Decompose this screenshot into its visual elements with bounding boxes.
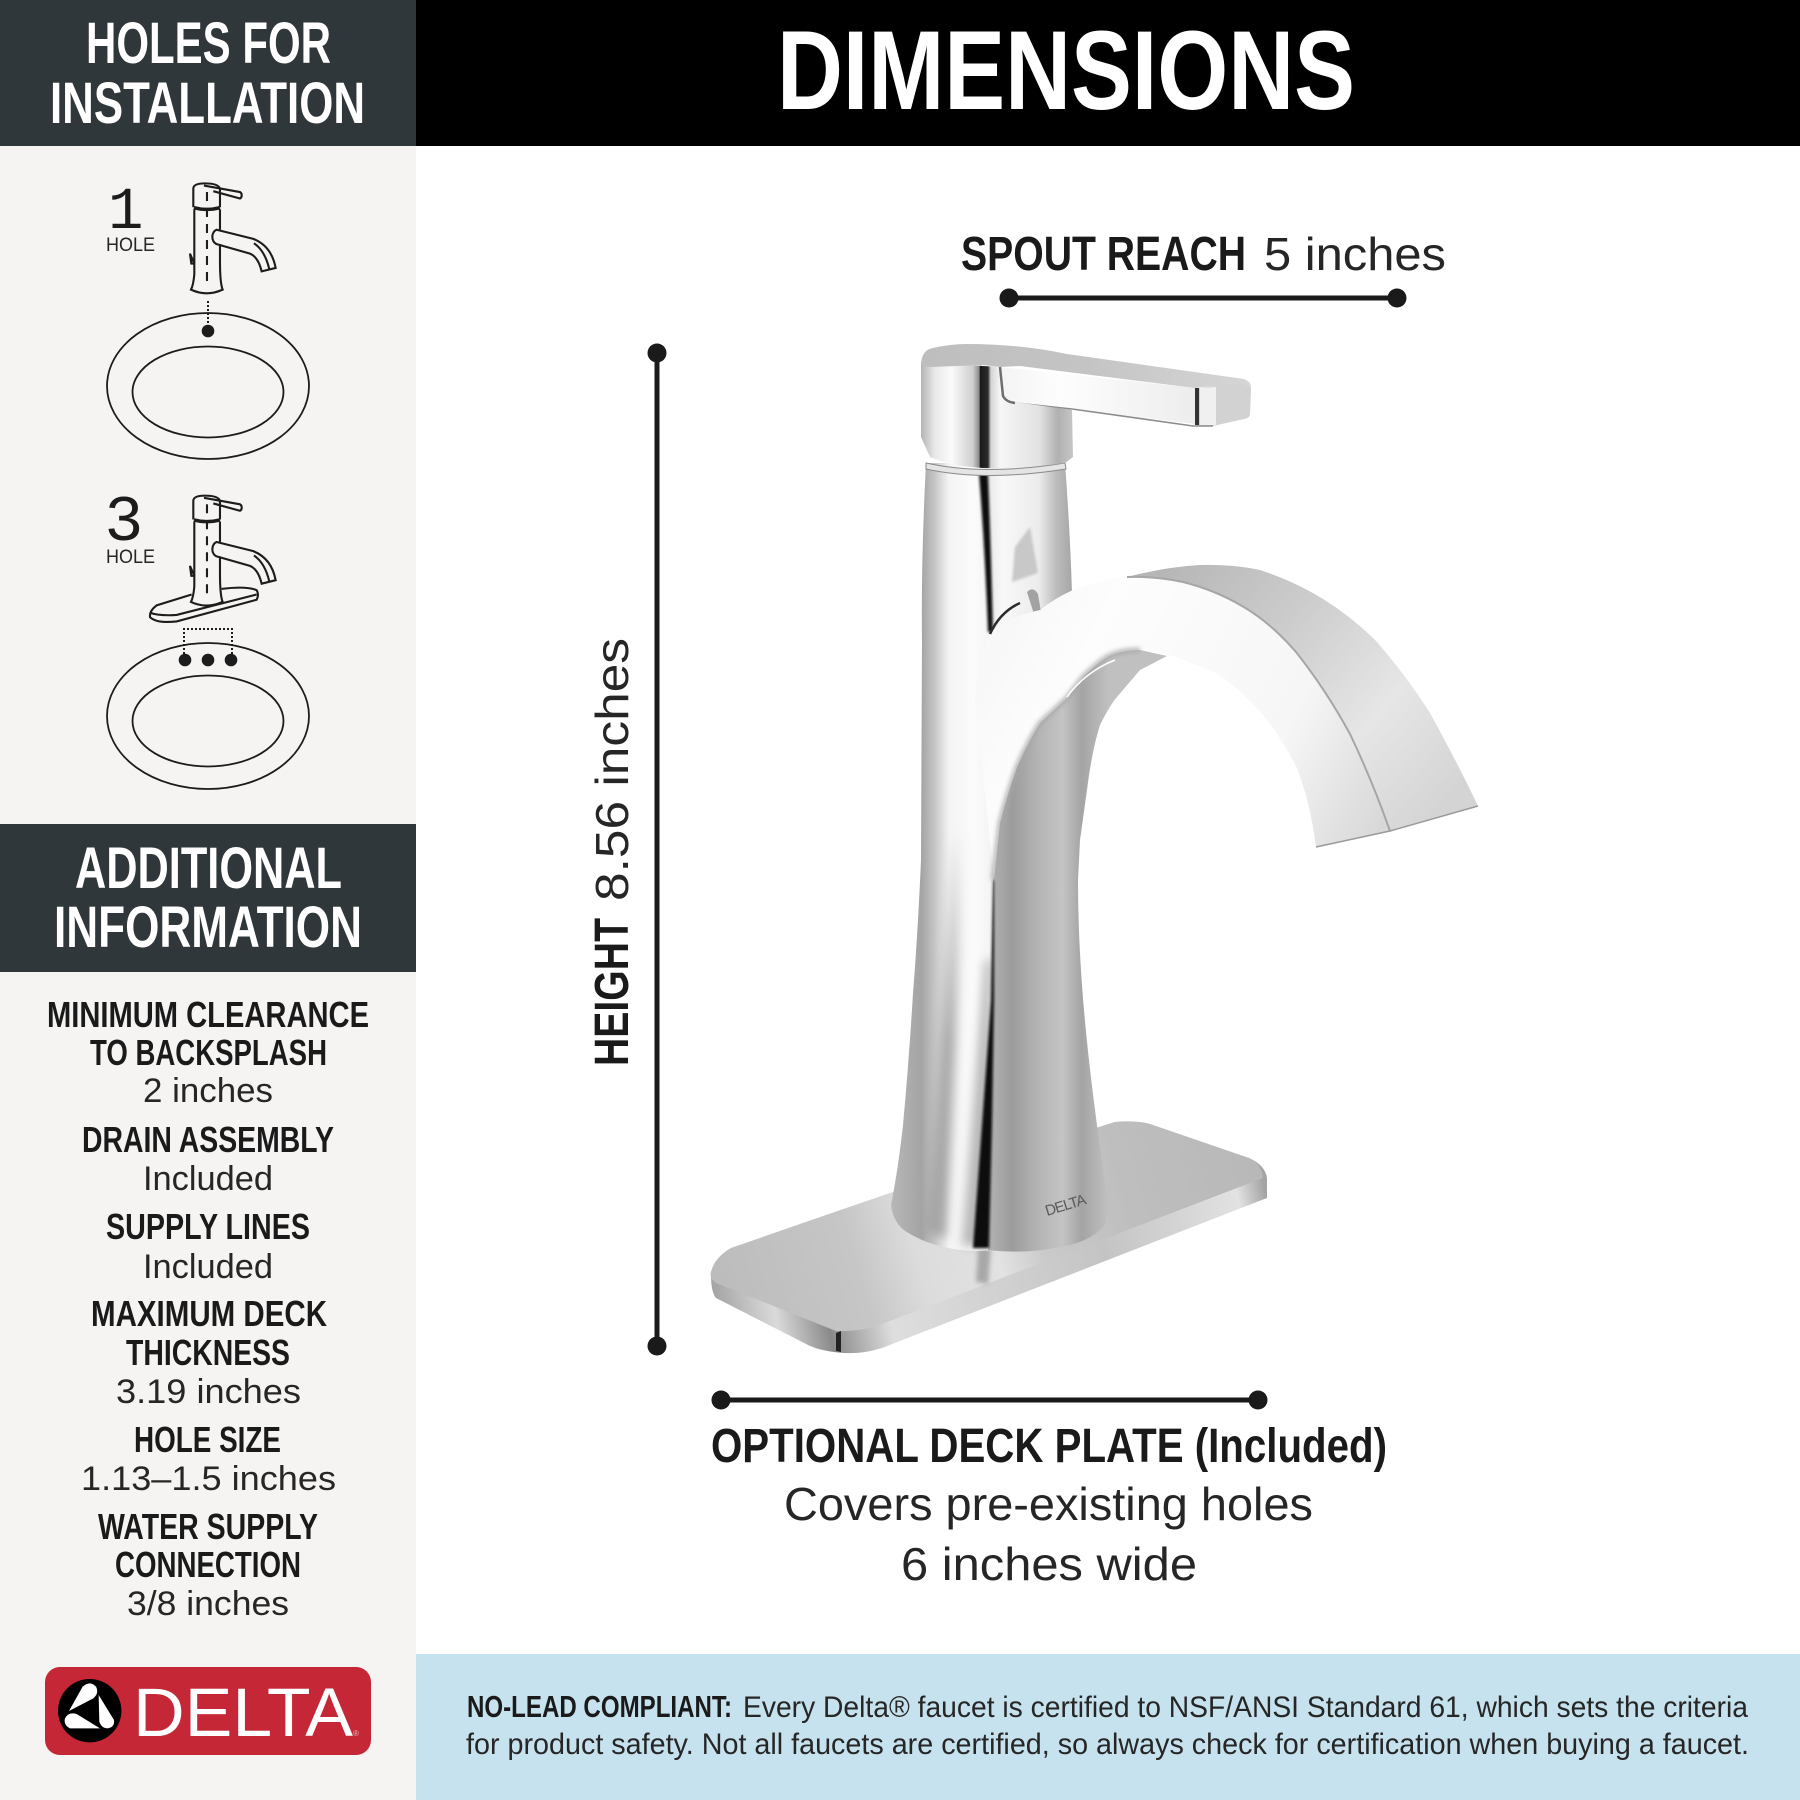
spec: hole size: 1.13–1.5 inches	[81, 1460, 336, 1498]
label: 1 hole: HOLE	[106, 235, 155, 256]
spec: supply lines	[106, 1206, 310, 1286]
header: holes for installation: HOLES FOR	[86, 11, 331, 76]
dimension: height: HEIGHT	[586, 918, 639, 1066]
panel: no-lead compliant note: NO-LEAD COMPLIANT:	[467, 1689, 732, 1724]
icon: sink, three holes	[107, 643, 309, 789]
logo: Delta: ®	[353, 1729, 359, 1738]
logo mark on base: DELTA	[1043, 1191, 1088, 1220]
spec: maximum deck thickness	[91, 1293, 327, 1411]
handle lever	[1000, 367, 1251, 426]
connector: dotted bracket to holes	[184, 629, 232, 654]
handle junction shadow	[1000, 367, 1015, 403]
spec: water supply connection: WATER SUPPLY	[98, 1506, 318, 1547]
panel: 1 hole diagram	[106, 179, 309, 459]
label: 3 hole: 3	[106, 485, 142, 554]
small fitting	[1027, 589, 1041, 614]
dimension: optional deck plate: OPTIONAL DECK PLATE (Included)	[711, 1420, 1387, 1473]
dimension: spout reach: SPOUT REACH	[961, 228, 1246, 281]
logo: Delta: DELTA	[133, 1674, 353, 1751]
spec: water supply connection: 3/8 inches	[127, 1585, 289, 1623]
text block: additional information list	[47, 994, 369, 1623]
spec: drain assembly	[82, 1119, 334, 1198]
spec: minimum clearance: 2 inches	[143, 1072, 273, 1110]
spec: minimum clearance: TO BACKSPLASH	[90, 1032, 327, 1073]
spec: hole size	[81, 1419, 336, 1498]
panel: no-lead compliant note: for product safety. Not all faucets are certified, so always check for certification when buying a faucet.	[466, 1728, 1749, 1761]
icon: sink, single hole	[107, 313, 309, 459]
spout edge highlight	[1067, 660, 1115, 697]
dimension: spout reach	[961, 228, 1446, 308]
spout top surface	[1127, 565, 1478, 831]
spec: minimum clearance: MINIMUM CLEARANCE	[47, 994, 369, 1035]
header: additional information	[0, 824, 416, 972]
neck ring	[926, 463, 1066, 476]
upper body reflection	[1012, 527, 1038, 582]
header: holes for installation	[0, 0, 416, 146]
spec: maximum deck thickness: THICKNESS	[126, 1332, 290, 1373]
spout lower edge shadow	[993, 650, 1140, 880]
spout tip	[1316, 806, 1478, 847]
spec: water supply connection	[98, 1506, 318, 1623]
spec: drain assembly: DRAIN ASSEMBLY	[82, 1119, 334, 1160]
upper body, right side	[985, 463, 1072, 634]
image: chrome faucet	[711, 344, 1478, 1353]
header: additional information: INFORMATION	[54, 895, 362, 960]
title: dimensions: DIMENSIONS	[777, 8, 1355, 133]
dimension: optional deck plate: Covers pre-existing holes	[784, 1478, 1313, 1530]
panel: 3 hole diagram	[106, 485, 309, 789]
panel: no-lead compliant note: Every Delta® faucet is certified to NSF/ANSI Standard 61, which sets the criteria	[743, 1691, 1748, 1724]
arrow: deck plate line	[712, 1390, 1268, 1410]
arrow: height line	[648, 344, 666, 1356]
spec: maximum deck thickness: MAXIMUM DECK	[91, 1293, 327, 1334]
dimension: optional deck plate: 6 inches wide	[901, 1538, 1197, 1590]
dimension: spout reach: 5 inches	[1264, 228, 1446, 280]
handle cap	[921, 362, 1073, 468]
dimension: height	[586, 344, 666, 1356]
logo: Delta	[45, 1667, 371, 1755]
panel: left sidebar	[0, 0, 416, 1800]
faucet body, left side	[891, 463, 1000, 1251]
spout front face	[975, 577, 1390, 880]
arrow: spout reach line	[1000, 288, 1406, 308]
label: 1 hole: 1	[108, 179, 143, 246]
icon: faucet with deck plate	[150, 496, 276, 622]
spec: minimum clearance	[47, 994, 369, 1110]
header: holes for installation: INSTALLATION	[50, 71, 365, 136]
spec: hole size: HOLE SIZE	[134, 1419, 281, 1460]
spec: water supply connection: CONNECTION	[115, 1544, 301, 1585]
panel: no-lead compliant note	[416, 1654, 1800, 1800]
icon: faucet, single hole	[190, 183, 276, 293]
spout edge line	[1127, 577, 1390, 831]
header: additional information: ADDITIONAL	[75, 836, 342, 901]
spec: supply lines: Included	[143, 1248, 273, 1286]
label: 3 hole: HOLE	[106, 547, 155, 568]
body shading beside lower reflection	[962, 960, 992, 1246]
dimension: optional deck plate	[711, 1390, 1387, 1590]
connector: dotted line to hole	[207, 301, 209, 326]
spec: drain assembly: Included	[143, 1160, 273, 1198]
spec: maximum deck thickness: 3.19 inches	[116, 1373, 301, 1411]
body lower dark reflection	[973, 880, 994, 1248]
faucet body, right side and spout underside	[988, 650, 1167, 1252]
title: dimensions	[416, 0, 1800, 146]
spout joint dark curve	[990, 603, 1020, 634]
handle and cap top surface	[921, 344, 1251, 388]
deck plate	[711, 1121, 1267, 1353]
spec: supply lines: SUPPLY LINES	[106, 1206, 310, 1247]
body dark reflection	[979, 474, 993, 632]
label: 1 hole	[106, 179, 155, 256]
dimension: height: 8.56 inches	[586, 638, 638, 901]
body shading strip	[925, 830, 962, 1238]
label: 3 hole	[106, 485, 155, 568]
